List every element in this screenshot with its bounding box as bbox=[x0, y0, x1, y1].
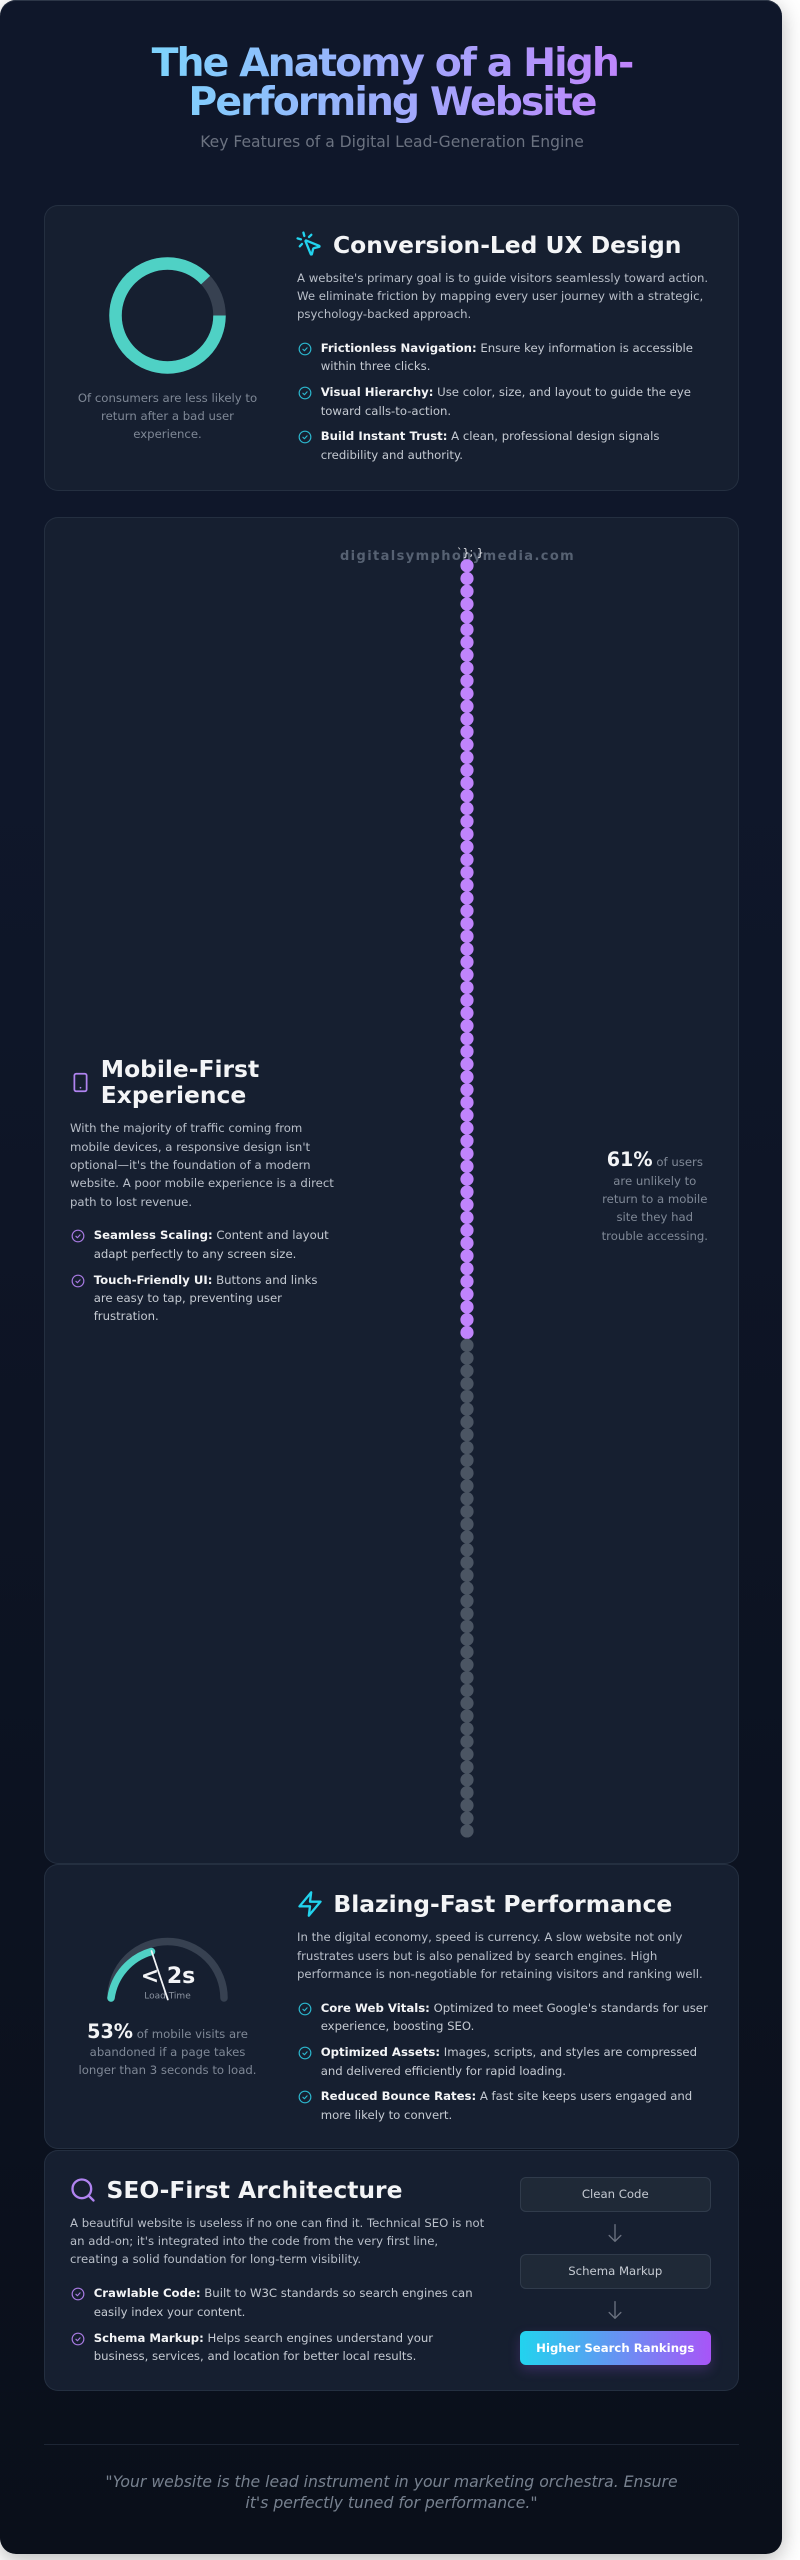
list item: schema markup: business, services, and location for better local results. bbox=[94, 2349, 416, 2363]
body text: an add-on; it's integrated into the code from the very first line, bbox=[70, 2234, 438, 2248]
panel: conversion-led UX design bbox=[44, 205, 739, 491]
icon: search bbox=[71, 2178, 95, 2202]
list item: frictionless navigation: Frictionless Navigation: Ensure key information is accessible bbox=[321, 341, 693, 355]
heading: Conversion-Led UX Design bbox=[333, 231, 681, 259]
body text: With the majority of traffic coming from bbox=[70, 1121, 302, 1135]
dot chart: 61 of 100 bbox=[460, 559, 474, 1838]
arrow bbox=[608, 2301, 622, 2319]
list item: core web vitals bbox=[298, 2001, 708, 2033]
flow step: clean code: Clean Code bbox=[582, 2187, 649, 2201]
body text: A beautiful website is useless if no one can find it. Technical SEO is not bbox=[70, 2216, 484, 2230]
list item: visual hierarchy: toward calls-to-action. bbox=[321, 404, 451, 418]
list item: frictionless navigation bbox=[298, 341, 693, 373]
stat: 61 percent: trouble accessing. bbox=[602, 1228, 708, 1242]
stat: 61 percent: site they had bbox=[616, 1210, 693, 1224]
list item: schema markup: Schema Markup: Helps search engines understand your bbox=[94, 2331, 433, 2345]
body text: path to lost revenue. bbox=[70, 1194, 192, 1208]
stat: 53 percent bbox=[78, 2020, 256, 2077]
flow result: higher search rankings: Higher Search Rankings bbox=[536, 2341, 694, 2355]
panel: mobile-first experience bbox=[44, 517, 739, 1864]
list item: seamless scaling bbox=[72, 1228, 329, 1261]
donut caption: experience. bbox=[133, 427, 202, 441]
body text bbox=[297, 1930, 703, 1981]
body text bbox=[297, 271, 708, 321]
list item: build instant trust: credibility and authority. bbox=[321, 448, 463, 462]
list item: visual hierarchy: Visual Hierarchy: Use color, size, and layout to guide the eye bbox=[321, 385, 691, 399]
list item: optimized assets: Optimized Assets: Images, scripts, and styles are compressed bbox=[321, 2045, 697, 2059]
panel: SEO-first architecture bbox=[44, 2150, 739, 2391]
body text: website. A poor mobile experience is a direct bbox=[70, 1176, 334, 1190]
list item: core web vitals: experience, boosting SEO. bbox=[321, 2019, 474, 2033]
stat: 61 percent: are unlikely to bbox=[613, 1174, 696, 1188]
list item: crawlable code: easily index your content. bbox=[94, 2305, 245, 2319]
list item: touch-friendly UI bbox=[72, 1273, 318, 1323]
flow step: schema markup bbox=[520, 2254, 710, 2289]
gray dots bbox=[460, 1345, 474, 1832]
heading bbox=[101, 1055, 259, 1109]
heading: SEO-First Architecture bbox=[106, 2176, 402, 2204]
body text: psychology-backed approach. bbox=[297, 307, 471, 321]
stat: 61 percent: 61% of users bbox=[607, 1148, 703, 1171]
gauge fill bbox=[111, 1952, 152, 1998]
panel: blazing-fast performance bbox=[44, 1864, 739, 2149]
body text: optional—it's the foundation of a modern bbox=[70, 1158, 311, 1172]
gauge track bbox=[111, 1942, 224, 1998]
list item: touch-friendly UI: are easy to tap, preventing user bbox=[94, 1291, 282, 1305]
heading: Blazing-Fast Performance bbox=[333, 1890, 672, 1918]
list item: reduced bounce rates: more likely to convert. bbox=[321, 2108, 452, 2122]
icon: mouse pointer click bbox=[296, 231, 321, 256]
body text bbox=[70, 2216, 484, 2266]
stat: 61 percent bbox=[602, 1148, 708, 1242]
list item: touch-friendly UI: frustration. bbox=[94, 1309, 159, 1323]
body text: We eliminate friction by mapping every user journey with a strategic, bbox=[297, 289, 703, 303]
body text: mobile devices, a responsive design isn't bbox=[70, 1140, 310, 1154]
list item: visual hierarchy bbox=[298, 385, 691, 418]
list item: touch-friendly UI: Touch-Friendly UI: Buttons and links bbox=[94, 1273, 318, 1287]
icon: lightning bolt bbox=[298, 1891, 322, 1917]
gauge value: < 2s bbox=[141, 1964, 195, 1989]
gauge needle bbox=[152, 1951, 168, 2000]
donut chart: 88 percent bbox=[109, 257, 226, 374]
stat: 61 percent: return to a mobile bbox=[602, 1192, 708, 1206]
title: Performing Website bbox=[188, 79, 596, 125]
body text bbox=[70, 1121, 334, 1208]
arrow bbox=[608, 2224, 622, 2242]
list item: crawlable code bbox=[72, 2286, 473, 2319]
gauge chart bbox=[107, 1938, 228, 2002]
list item: reduced bounce rates: Reduced Bounce Rates: A fast site keeps users engaged and bbox=[321, 2089, 692, 2103]
gauge label: Load Time bbox=[144, 1992, 191, 2002]
body text: performance is non-negotiable for retaining visitors and ranking well. bbox=[297, 1967, 703, 1981]
list item: frictionless navigation: within three clicks. bbox=[321, 359, 430, 373]
closing quote: it's perfectly tuned for performance." bbox=[245, 2492, 538, 2512]
list item: build instant trust bbox=[298, 429, 659, 462]
donut caption: return after a bad user bbox=[101, 409, 234, 423]
title bbox=[132, 44, 652, 123]
list item: optimized assets bbox=[298, 2045, 697, 2078]
body text: creating a solid foundation for long-term visibility. bbox=[70, 2252, 361, 2266]
stray code characters: `}; } bbox=[457, 546, 484, 559]
heading: Experience bbox=[101, 1081, 246, 1109]
stat: 53 percent: longer than 3 seconds to load. bbox=[78, 2063, 256, 2077]
donut caption: Of consumers are less likely to bbox=[78, 391, 257, 405]
title: The Anatomy of a High- bbox=[152, 40, 632, 86]
list item: reduced bounce rates bbox=[298, 2089, 692, 2122]
stat: 53 percent: 53% of mobile visits are bbox=[87, 2020, 248, 2043]
body text: frustrates users but is also penalized by search engines. High bbox=[297, 1949, 657, 1963]
stat: 53 percent: abandoned if a page takes bbox=[90, 2045, 245, 2059]
list item: seamless scaling: Seamless Scaling: Content and layout bbox=[94, 1228, 329, 1242]
icon: smartphone bbox=[74, 1072, 88, 1092]
list item: core web vitals: Core Web Vitals: Optimized to meet Google's standards for user bbox=[321, 2001, 708, 2015]
flow step: schema markup: Schema Markup bbox=[568, 2264, 662, 2278]
list item: seamless scaling: adapt perfectly to any screen size. bbox=[94, 1247, 296, 1261]
list item: build instant trust: Build Instant Trust: A clean, professional design signals bbox=[321, 429, 659, 443]
body text: In the digital economy, speed is currency. A slow website not only bbox=[297, 1930, 682, 1944]
list item: crawlable code: Crawlable Code: Built to W3C standards so search engines can bbox=[94, 2286, 473, 2300]
flow step: clean code bbox=[520, 2177, 710, 2212]
list item: optimized assets: and delivered efficiently for rapid loading. bbox=[321, 2064, 566, 2078]
closing quote: "Your website is the lead instrument in your marketing orchestra. Ensure bbox=[105, 2472, 678, 2490]
body text: A website's primary goal is to guide visitors seamlessly toward action. bbox=[297, 271, 708, 285]
closing quote bbox=[105, 2472, 678, 2512]
purple dots bbox=[460, 566, 474, 1333]
donut caption bbox=[78, 391, 257, 441]
watermark: digitalsymphonymedia.com bbox=[340, 549, 575, 564]
subtitle: Key Features of a Digital Lead-Generation Engine bbox=[200, 133, 584, 151]
list item: schema markup bbox=[72, 2331, 434, 2363]
flow result: higher search rankings bbox=[520, 2331, 710, 2365]
heading: Mobile-First bbox=[101, 1055, 259, 1083]
